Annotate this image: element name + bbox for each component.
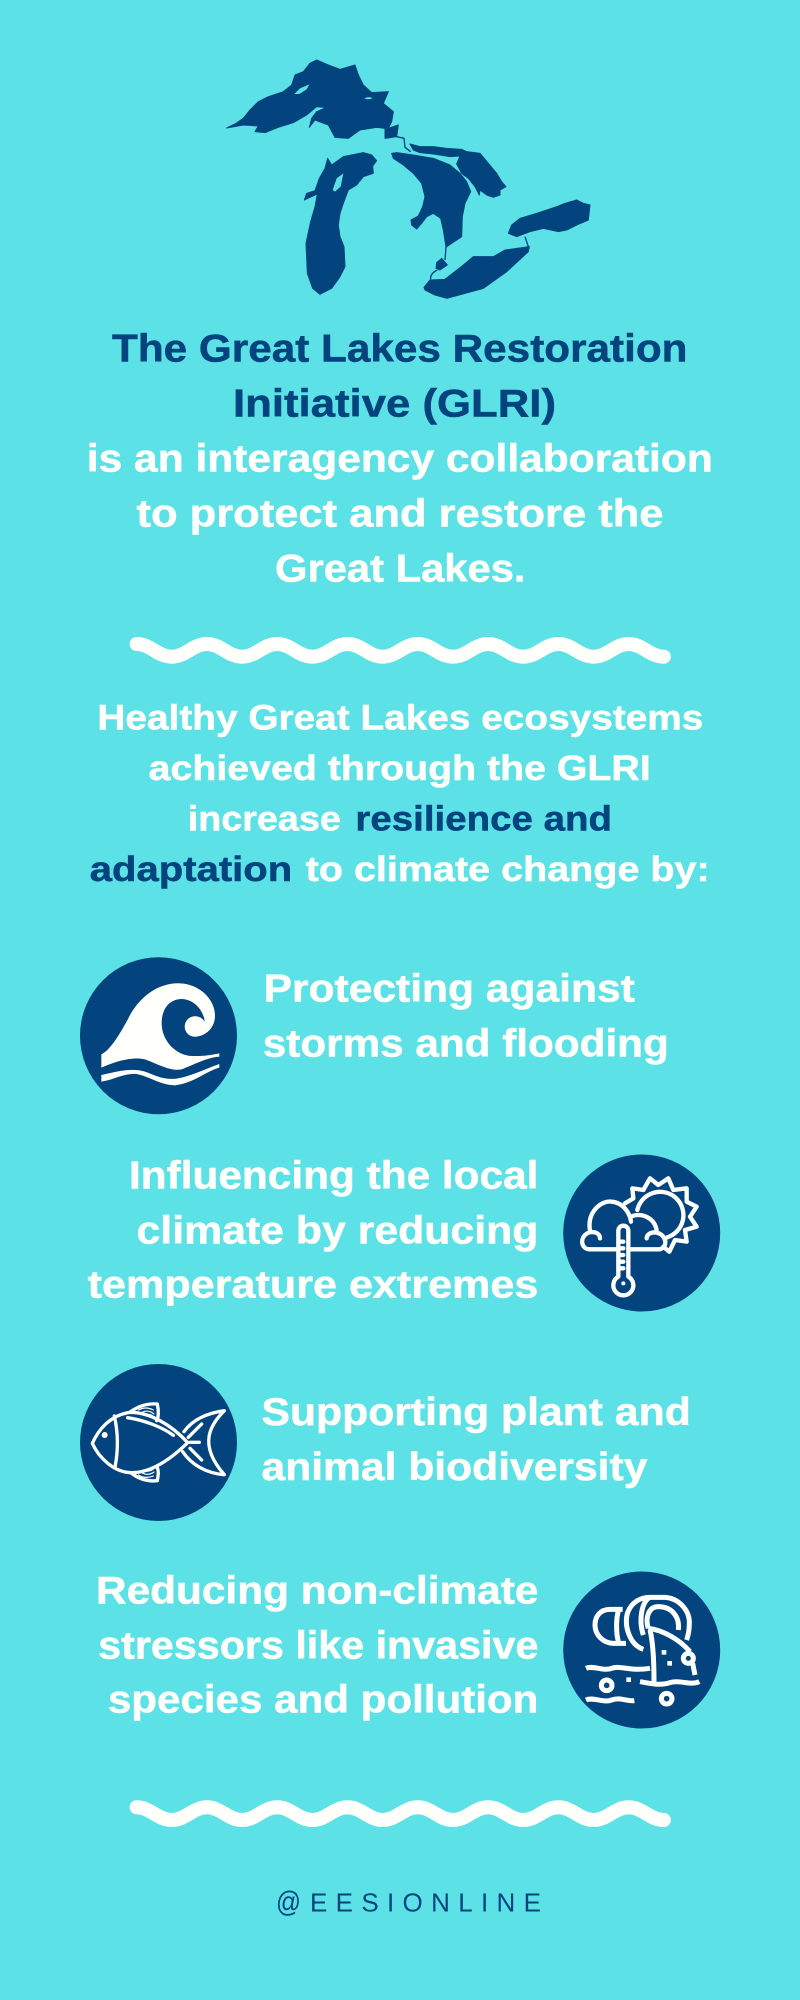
text: GLRI description: Great Lakes. (275, 548, 526, 591)
text: supporting biodiversity: animal biodiversity (262, 1446, 648, 1489)
text: climate resilience intro: Healthy Great Lakes ecosystems (97, 697, 703, 737)
text: GLRI description: is an interagency collaboration (87, 438, 713, 481)
text: reducing non-climate stressors (96, 1569, 538, 1722)
footer: social handle: EESIONLINE (310, 1888, 541, 1918)
connecting channels (397, 137, 528, 279)
text: climate resilience intro: increase (188, 799, 341, 839)
lake: Erie (424, 247, 529, 298)
lake: Huron north channel and Georgian Bay (410, 144, 506, 197)
icon: cloud sun thermometer (563, 1154, 720, 1312)
text: protecting against storms: storms and flooding (263, 1023, 669, 1066)
text: supporting biodiversity (262, 1391, 691, 1489)
text: climate resilience intro: adaptation (90, 849, 292, 889)
text: reducing non-climate stressors: stressors like invasive (98, 1624, 538, 1667)
lake: St Clair (436, 258, 447, 270)
lake: Huron main basin (392, 153, 471, 247)
text: climate resilience intro (90, 697, 710, 889)
text: climate resilience intro: to climate change by: (306, 849, 710, 889)
text: influencing local climate: Influencing the local (129, 1154, 538, 1197)
text: climate resilience intro: resilience and (355, 799, 612, 839)
text: influencing local climate (88, 1154, 538, 1307)
icon: fish (80, 1364, 237, 1521)
heading: GLRI title (112, 328, 688, 426)
lake: Ontario (508, 200, 590, 237)
islands: Superior (294, 84, 373, 99)
map: Great Lakes (227, 60, 590, 298)
text: protecting against storms: Protecting against (264, 968, 635, 1011)
lake: Michigan (304, 153, 377, 294)
text: reducing non-climate stressors: Reducing non-climate (96, 1569, 538, 1612)
divider: top wave (137, 644, 664, 657)
divider: bottom wave (137, 1807, 664, 1820)
footer: social handle: @ (276, 1887, 301, 1919)
text: supporting biodiversity: Supporting plant and (262, 1391, 691, 1434)
text: climate resilience intro: achieved through the GLRI (149, 748, 651, 788)
text: influencing local climate: climate by reducing (136, 1209, 538, 1252)
text: reducing non-climate stressors: species and pollution (108, 1679, 538, 1722)
heading: GLRI title: The Great Lakes Restoration (112, 328, 688, 371)
icon: pollution pipe (563, 1572, 720, 1728)
icon: ocean wave (80, 957, 237, 1114)
text: GLRI description: to protect and restore the (136, 493, 664, 536)
lake: Superior (227, 60, 398, 138)
text: GLRI description (87, 438, 713, 591)
heading: GLRI title: Initiative (GLRI) (233, 383, 556, 426)
text: influencing local climate: temperature extremes (88, 1264, 538, 1307)
islands: Michigan peninsula (333, 173, 363, 193)
text: protecting against storms (263, 968, 669, 1066)
